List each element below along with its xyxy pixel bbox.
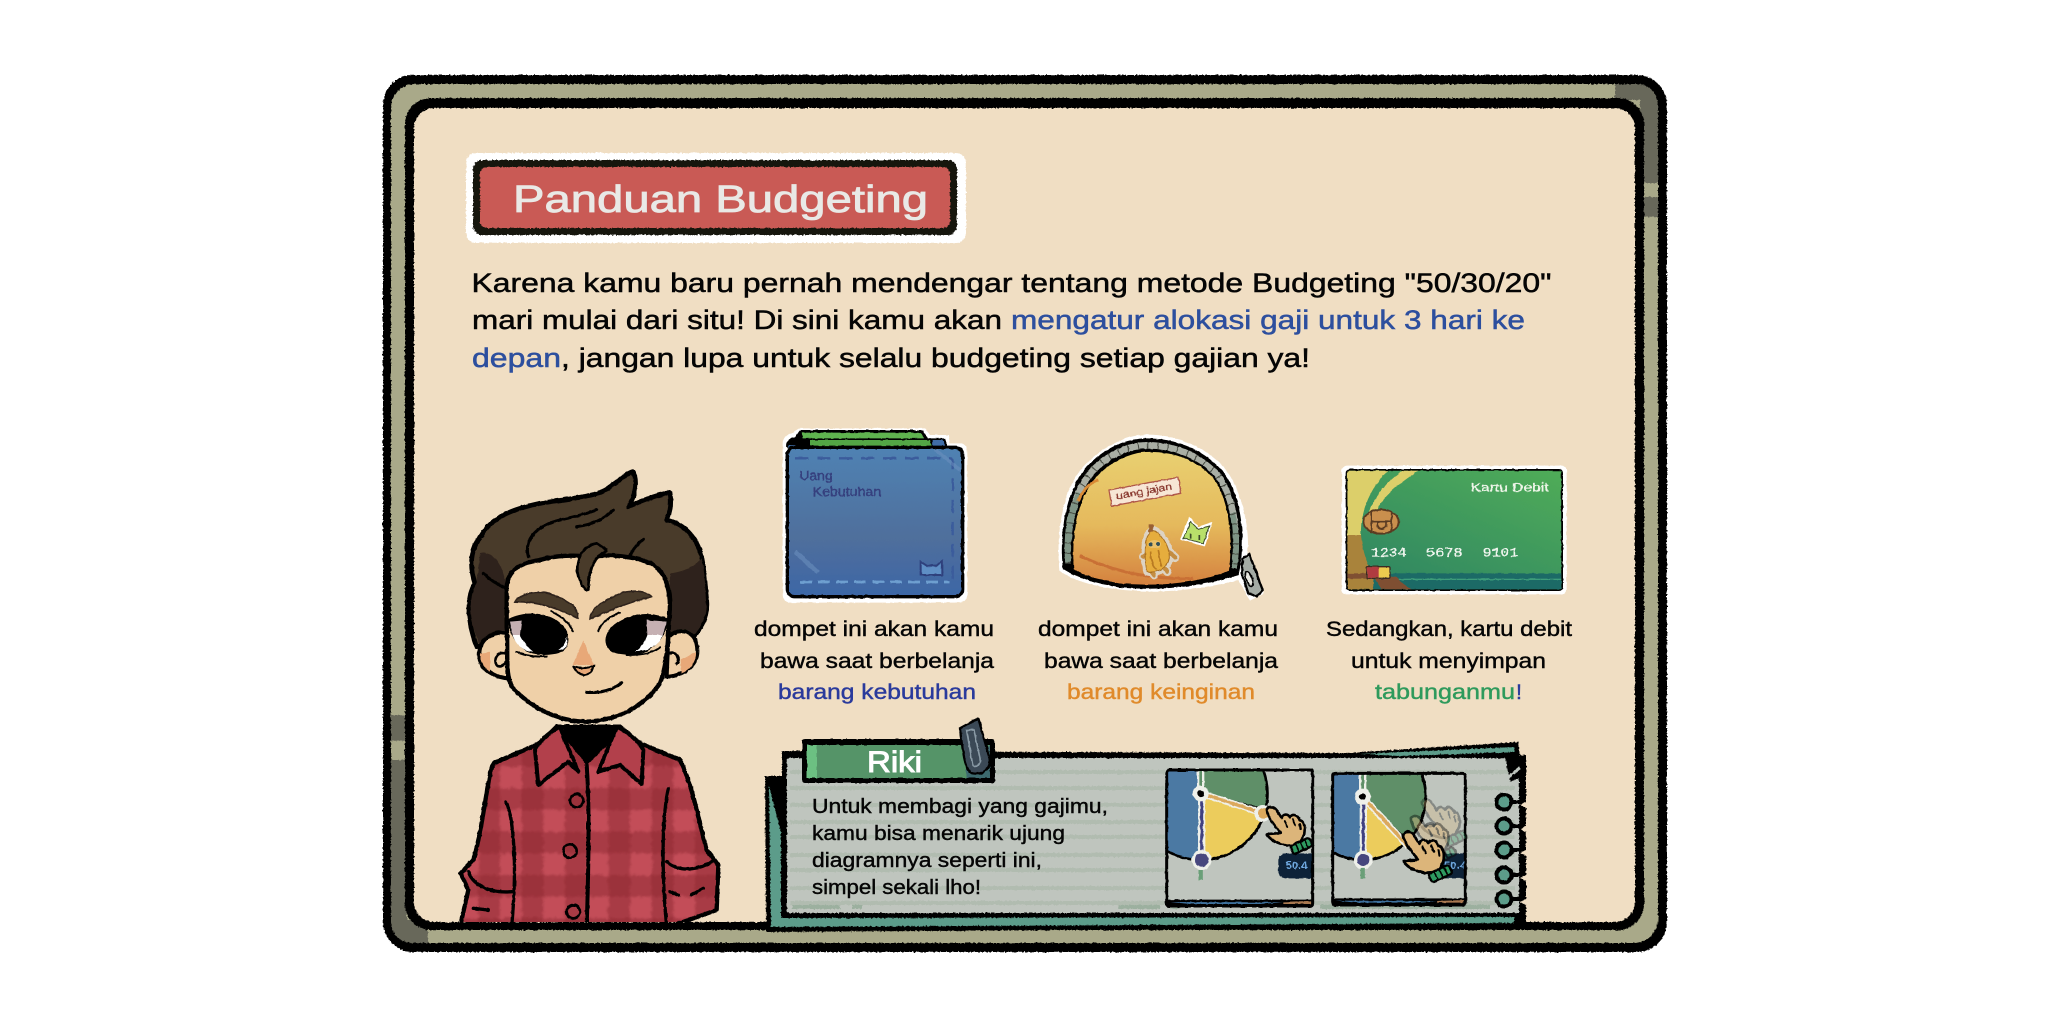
shirt: [458, 724, 721, 922]
tutorial: pie drag step two: [1330, 771, 1468, 907]
caption: debit card: Sedangkan, kartu debit: [1326, 617, 1572, 641]
ears: [479, 631, 697, 678]
caption: wants purse: dompet ini akan kamu: [1038, 617, 1278, 641]
caption: debit card: untuk menyimpan: [1351, 649, 1546, 673]
title badge: [466, 153, 966, 243]
item: debit card: 9101: [1483, 546, 1518, 561]
caption: wants purse: barang keinginan: [1067, 680, 1255, 704]
item: debit card: 5678: [1426, 546, 1463, 561]
tutorial: pie drag step one: 50.4: [1286, 860, 1308, 872]
caption: needs wallet: dompet ini akan kamu: [754, 617, 994, 641]
face: [507, 543, 670, 722]
item: blue wallet: Kebutuhan: [813, 485, 881, 499]
intro paragraph: , jangan lupa untuk selalu budgeting setiap gajian ya!: [561, 343, 1310, 373]
hair: [469, 472, 707, 647]
caption: wants purse: bawa saat berbelanja: [1044, 649, 1278, 673]
panel: dialogue notebook: [765, 718, 1526, 932]
item: blue wallet: Uang: [799, 469, 833, 483]
caption: debit card: [1326, 617, 1572, 704]
dialogue text: Untuk membagi yang gajimu,: [812, 795, 1108, 818]
item: yellow coin purse: [1059, 435, 1264, 601]
intro paragraph: [472, 268, 1552, 373]
notebook spiral rings: [1496, 794, 1522, 906]
item: blue wallet: [783, 428, 967, 603]
name tab: Riki: [802, 739, 995, 783]
title badge: Panduan Budgeting: [513, 179, 928, 221]
tutorial: pie drag step one: [1164, 768, 1315, 908]
intro paragraph: mengatur alokasi gaji untuk 3 hari ke: [1011, 305, 1525, 335]
intro paragraph: depan: [472, 343, 561, 373]
item: debit card: 1234: [1371, 546, 1407, 561]
dialogue text: diagramnya seperti ini,: [812, 849, 1042, 872]
caption: debit card: !: [1516, 680, 1522, 704]
intro paragraph: mari mulai dari situ! Di sini kamu akan: [472, 305, 1002, 335]
dialogue text: kamu bisa menarik ujung: [812, 822, 1065, 845]
dialogue text: [812, 795, 1108, 899]
icon: paper clip: [960, 718, 990, 774]
caption: debit card: tabunganmu: [1375, 680, 1515, 704]
name tab: Riki: Riki: [867, 746, 922, 779]
caption: needs wallet: bawa saat berbelanja: [760, 649, 994, 673]
tutorial: pie drag step two: 50.4: [1444, 860, 1467, 872]
caption: needs wallet: [754, 617, 994, 704]
caption: wants purse: [1038, 617, 1278, 704]
item: yellow coin purse: uang jajan: [1115, 482, 1173, 502]
caption: needs wallet: barang kebutuhan: [778, 680, 976, 704]
infographic canvas: [382, 74, 1668, 953]
panel: outer frame: [383, 75, 1667, 952]
dialogue text: simpel sekali lho!: [812, 876, 981, 899]
notebook backing and paper: [765, 742, 1526, 932]
item: debit card: Kartu Debit: [1471, 481, 1550, 495]
intro paragraph: Karena kamu baru pernah mendengar tentang metode Budgeting "50/30/20": [472, 268, 1552, 298]
item: debit card: [1342, 466, 1567, 594]
character: Riki: [447, 472, 733, 933]
